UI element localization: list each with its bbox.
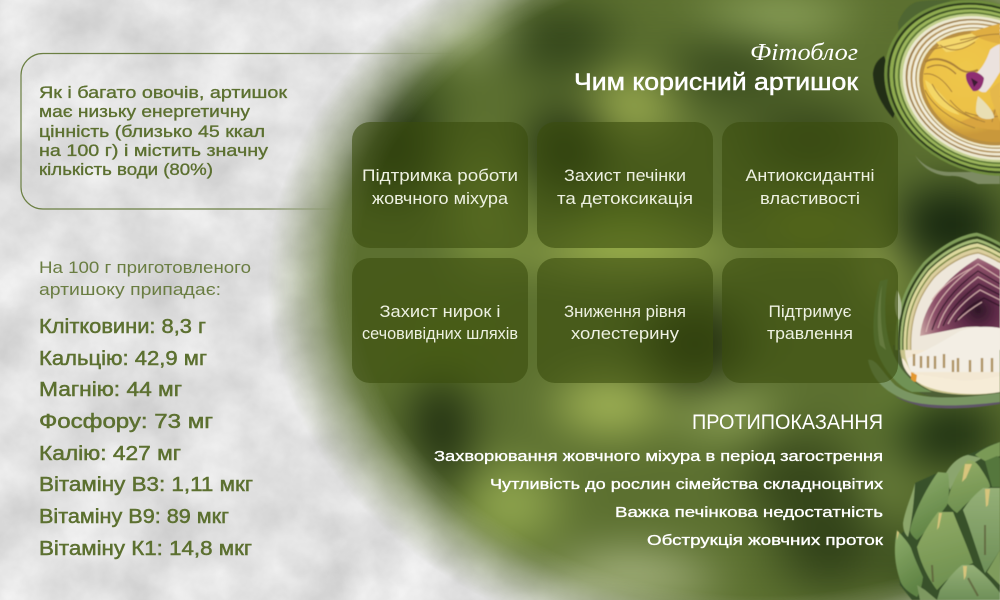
panel: digestion bbox=[722, 258, 898, 383]
list: nutrients: Вітаміну К1: 14,8 мкг bbox=[39, 538, 252, 560]
list: contraindications: Захворювання жовчного міхура в період загострення bbox=[434, 448, 883, 465]
panel: kidney protection: Захист нирок і bbox=[380, 303, 500, 321]
panel: cholesterol bbox=[537, 258, 713, 383]
panel: cholesterol: Зниження рівня bbox=[564, 303, 686, 321]
icon: whole artichoke bbox=[894, 442, 1000, 600]
list: nutrients: Фосфору: 73 мг bbox=[39, 411, 213, 433]
panel: kidney protection bbox=[352, 258, 528, 383]
list: contraindications: Важка печінкова недостатність bbox=[615, 504, 883, 521]
panel: gallbladder support: Підтримка роботи bbox=[362, 167, 518, 185]
list: nutrients: Магнію: 44 мг bbox=[39, 379, 182, 401]
text: intro paragraph: кількість води (80%) bbox=[39, 160, 213, 179]
panel: intro callout bbox=[21, 54, 460, 209]
panel: antioxidant: властивості bbox=[760, 190, 860, 208]
panel: digestion: травлення bbox=[767, 325, 853, 343]
list: contraindications: Обструкція жовчних проток bbox=[647, 532, 884, 549]
heading: main title: Чим корисний артишок bbox=[574, 69, 859, 96]
panel: antioxidant: Антиоксидантні bbox=[746, 167, 874, 185]
panel: cholesterol: холестерину bbox=[571, 325, 680, 343]
title bbox=[574, 40, 859, 96]
panel: gallbladder support: жовчного міхура bbox=[372, 190, 509, 208]
text: intro paragraph: на 100 г) і містить значну bbox=[39, 141, 269, 160]
list: nutrients: Кальцію: 42,9 мг bbox=[39, 348, 207, 370]
list: nutrients: Клітковини: 8,3 г bbox=[39, 316, 206, 338]
icon: artichoke cut lengthwise bbox=[868, 232, 1000, 409]
panel: liver protection bbox=[537, 122, 713, 248]
text: nutrients intro: На 100 г приготовленого bbox=[39, 259, 251, 277]
heading: contraindications: ПРОТИПОКАЗАННЯ bbox=[692, 411, 883, 434]
text: intro paragraph: Як і багато овочів, артишок bbox=[39, 83, 288, 102]
list: contraindications: Чутливість до рослин сімейства складноцвітих bbox=[490, 476, 884, 493]
list: contraindications bbox=[434, 448, 884, 549]
list: nutrients bbox=[39, 316, 253, 560]
panel: digestion: Підтримує bbox=[768, 303, 852, 321]
list: nutrients: Вітаміну В3: 1,11 мкг bbox=[39, 474, 253, 496]
text: intro paragraph bbox=[39, 83, 288, 179]
panel: antioxidant bbox=[722, 122, 898, 248]
panel: liver protection: та детоксикація bbox=[557, 190, 693, 208]
panel: gallbladder support bbox=[352, 122, 528, 248]
background: blurred green artichoke bbox=[272, 0, 1000, 600]
text: intro paragraph: має низьку енергетичну bbox=[39, 102, 251, 121]
icon: artichoke cut across bbox=[872, 0, 1000, 184]
list: nutrients: Калію: 427 мг bbox=[39, 443, 181, 465]
text: intro paragraph: цінність (близько 45 ккал bbox=[39, 122, 265, 141]
text: nutrients intro: артишоку припадає: bbox=[39, 281, 221, 299]
text: brand: Фітоблог bbox=[750, 40, 858, 66]
panel: liver protection: Захист печінки bbox=[564, 167, 686, 185]
panel: kidney protection: сечовивідних шляхів bbox=[362, 325, 518, 343]
text: nutrients intro bbox=[39, 259, 251, 299]
list: nutrients: Вітаміну В9: 89 мкг bbox=[39, 506, 229, 528]
